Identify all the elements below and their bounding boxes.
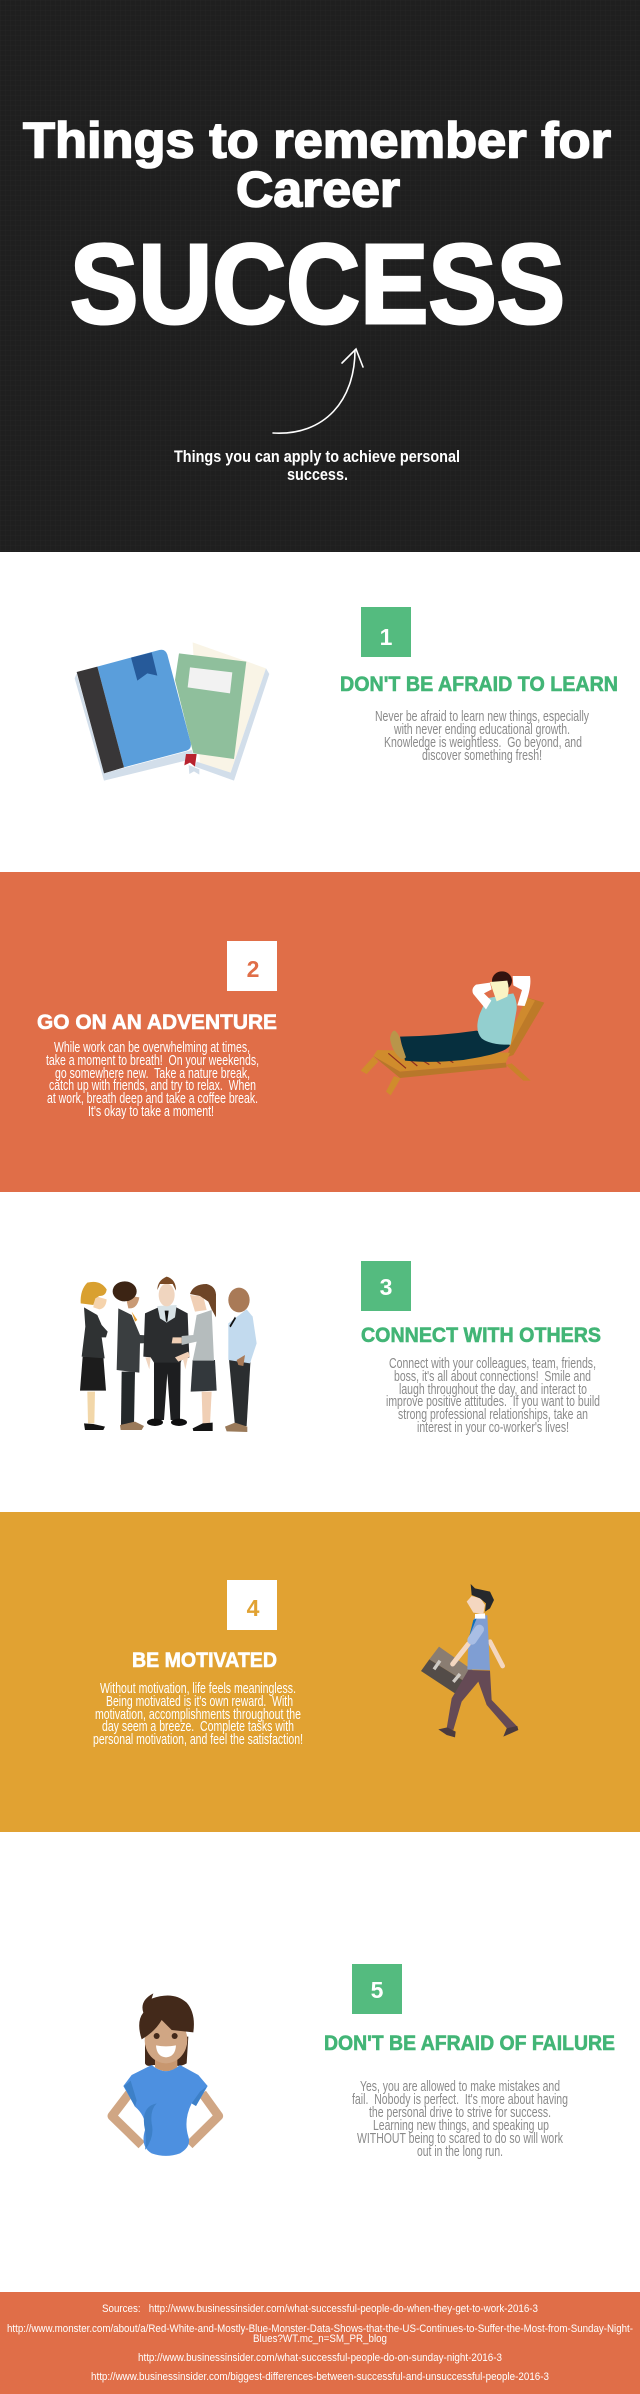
number badge 2: 2 xyxy=(247,956,259,982)
text block: Learning new things, and speaking up xyxy=(373,2118,549,2134)
heading: success: SUCCESS xyxy=(70,221,565,347)
number badge 3 xyxy=(361,1261,411,1311)
figure: woman in grey xyxy=(172,1284,217,1431)
sources text: Sources: http://www.businessinsider.com/what-successful-people-do-when-they-get-to-work-2016-3 xyxy=(102,2303,538,2315)
text block: take a moment to breath! On your weekends, xyxy=(46,1053,259,1069)
number badge 5: 5 xyxy=(371,1977,384,2003)
panel: step 5 failure xyxy=(0,1832,640,2292)
panel: step 3 connect xyxy=(0,1192,640,1512)
heading: CONNECT WITH OTHERS xyxy=(361,1324,601,1347)
text block: go somewhere new. Take a nature break, xyxy=(55,1066,250,1082)
text block: WITHOUT being to scared to do so will work xyxy=(357,2131,564,2147)
arrow xyxy=(273,349,363,433)
panel: sources footer xyxy=(0,2292,640,2394)
sources text: http://www.businessinsider.com/what-successful-people-do-on-sunday-night-2016-3 xyxy=(138,2352,502,2364)
text block: personal motivation, and feel the satisfaction! xyxy=(93,1732,303,1748)
number badge 2 xyxy=(227,941,277,991)
number badge 1 xyxy=(361,607,411,657)
subtitle: Things you can apply to achieve personal xyxy=(174,447,460,466)
text block: Yes, you are allowed to make mistakes and xyxy=(360,2079,560,2095)
icon: smiling woman xyxy=(112,1993,219,2156)
sources text: http://www.businessinsider.com/biggest-differences-between-successful-and-unsuccessful-people-2016-3 xyxy=(91,2371,549,2383)
icon: books xyxy=(75,642,269,781)
number badge 4: 4 xyxy=(247,1595,260,1621)
heading: GO ON AN ADVENTURE xyxy=(37,1011,277,1034)
figure: bald man xyxy=(225,1288,257,1432)
title xyxy=(23,112,611,218)
text block: discover something fresh! xyxy=(422,748,542,764)
number badge 5 xyxy=(352,1964,402,2014)
text block: motivation, accomplishments throughout the xyxy=(95,1707,301,1723)
subtitle xyxy=(174,447,460,484)
text block: It's okay to take a moment! xyxy=(88,1104,214,1120)
text block xyxy=(386,1356,600,1436)
subtitle: success. xyxy=(287,465,348,484)
text block: day seem a breeze. Complete tasks with xyxy=(102,1719,294,1735)
number badge 3: 3 xyxy=(380,1274,392,1300)
text block: with never ending educational growth. xyxy=(393,722,570,738)
figure: blond woman xyxy=(80,1282,108,1430)
panel: step 1 learn xyxy=(0,552,640,872)
heading: BE MOTIVATED xyxy=(132,1649,277,1672)
panel: step 2 adventure xyxy=(0,872,640,1192)
sources text xyxy=(7,2303,633,2383)
text block: out in the long run. xyxy=(417,2144,503,2160)
icon: group of colleagues xyxy=(80,1277,257,1432)
text block xyxy=(375,709,590,764)
text block xyxy=(46,1040,259,1120)
text block: at work, breath deep and take a coffee break. xyxy=(47,1091,258,1107)
text block xyxy=(352,2079,568,2160)
panel: header xyxy=(0,0,640,552)
text block: Being motivated is it's own reward. With xyxy=(106,1694,293,1710)
sources text: Blues?WT.mc_n=SM_PR_blog xyxy=(253,2333,387,2345)
panel: step 4 motivated xyxy=(0,1512,640,1832)
text block: catch up with friends, and try to relax. When xyxy=(49,1078,256,1094)
icon: walking man with briefcase xyxy=(421,1584,518,1737)
icon: man on lounger xyxy=(361,971,544,1095)
text block: the personal drive to strive for success. xyxy=(369,2105,551,2121)
text block xyxy=(93,1681,303,1748)
text block: While work can be overwhelming at times, xyxy=(54,1040,250,1056)
text block: Without motivation, life feels meaningless. xyxy=(100,1681,296,1697)
figure: man shaking hands xyxy=(113,1281,173,1430)
title: Things to remember for xyxy=(23,112,611,168)
figure: man in suit xyxy=(143,1277,189,1426)
number badge 1: 1 xyxy=(380,624,393,650)
heading: DON'T BE AFRAID OF FAILURE xyxy=(324,2032,615,2055)
number badge 4 xyxy=(227,1580,277,1630)
heading: DON'T BE AFRAID TO LEARN xyxy=(340,673,618,696)
text block: interest in your co-worker's lives! xyxy=(417,1420,569,1436)
title: Career xyxy=(236,162,400,218)
